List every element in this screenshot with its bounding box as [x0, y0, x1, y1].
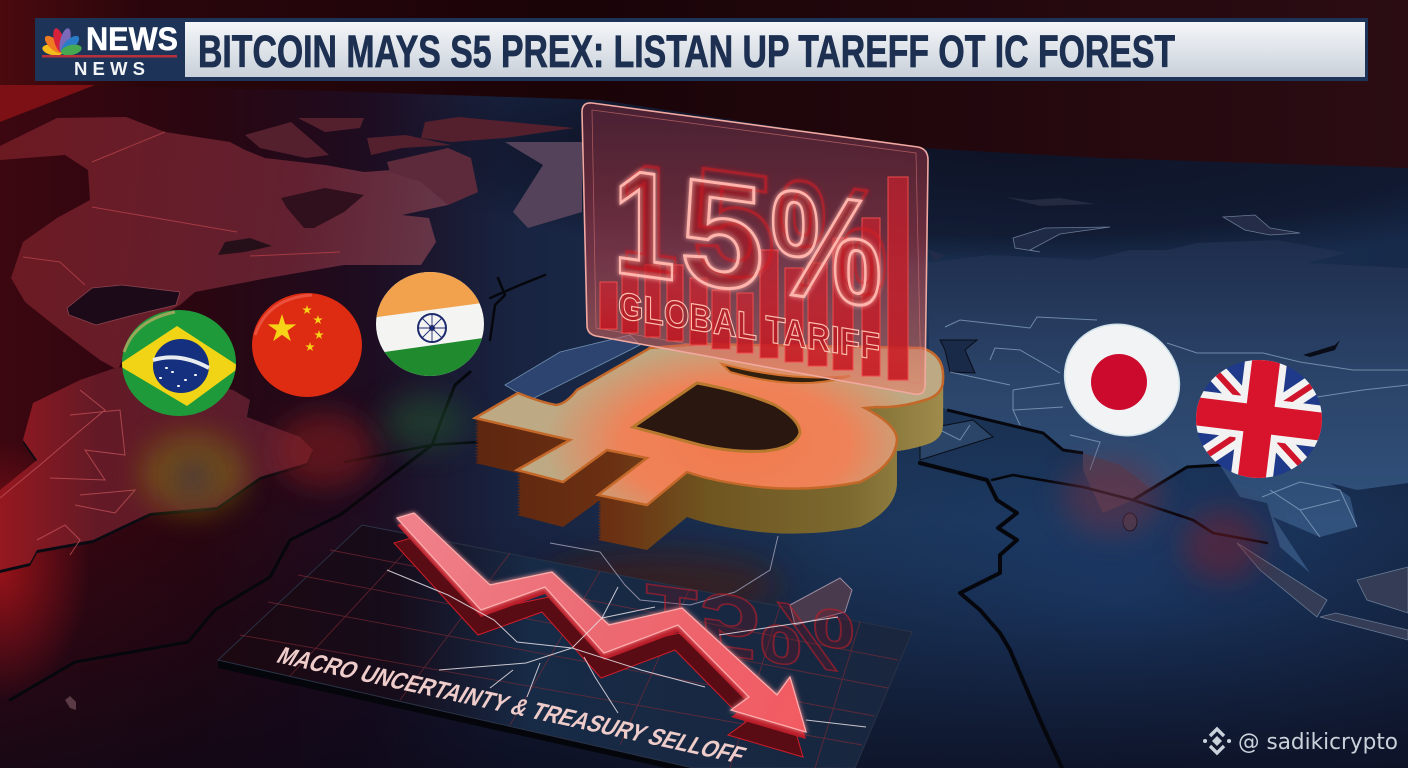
map: Eurasia: [505, 197, 1408, 640]
panel bar chart: [600, 177, 908, 380]
reflected 15% text: 15%: [640, 564, 855, 693]
map: border lines: [23, 132, 340, 285]
map: Southeast Asia islands: [928, 197, 1408, 640]
15% headline: 1: [620, 131, 678, 306]
map: Greenland: [505, 142, 582, 228]
flag: Japan: [1043, 302, 1201, 458]
map: coastline: [947, 410, 1083, 453]
flag: Brazil: [118, 310, 240, 416]
flag reflections: [141, 394, 1262, 617]
arrow side: [397, 520, 806, 739]
15% headline: 5: [692, 135, 776, 313]
white fracture lines: [387, 570, 866, 727]
map cracks: [10, 275, 1267, 768]
chart board: [218, 513, 912, 768]
map: southern Africa over board: [550, 536, 778, 605]
map: Hudson Bay: [281, 188, 364, 228]
map: border outlines: [940, 317, 1408, 537]
logo wordmark: NEWS: [86, 21, 178, 57]
map: great lakes: [218, 238, 272, 255]
arrow reflection: [394, 538, 803, 757]
board grid: [240, 536, 898, 768]
map: arctic islands: [245, 117, 574, 205]
ashoka chakra: [418, 314, 446, 342]
map: Madagascar: [790, 578, 852, 625]
header banner: [35, 18, 1368, 81]
global tariff label: GLOBAL TARIFF: [618, 284, 880, 369]
map: Arabia: [920, 420, 993, 460]
bitcoin inner hole: [633, 383, 800, 451]
map: Gulf of Mexico: [67, 285, 180, 325]
bitcoin symbol: [475, 344, 943, 550]
15% headline: 1: [613, 137, 675, 312]
15% headline: 5: [680, 146, 764, 324]
icon: diamond logo: [1205, 729, 1229, 753]
map: Sri Lanka: [1123, 513, 1137, 531]
flag: India: [376, 272, 484, 376]
flag: China: [252, 293, 362, 397]
holographic panel: [582, 103, 928, 394]
falling red arrow: [397, 513, 806, 732]
header banner: NEWS: [74, 58, 145, 79]
map: North America: [0, 117, 582, 370]
watermark: @ sadikicrypto: [1238, 730, 1398, 755]
map: India tint: [1083, 453, 1150, 513]
map: South America: [0, 367, 313, 710]
bitcoin upper slot: [722, 364, 850, 383]
15% headline: %: [770, 157, 882, 339]
map: Africa tip by coin: [505, 335, 640, 400]
map: Caspian and Baikal: [940, 340, 977, 373]
icon: peacock logo: [41, 27, 83, 57]
flag: United Kingdom: [1196, 360, 1322, 478]
15% headline: %: [778, 147, 888, 329]
15% headline: [613, 131, 888, 339]
